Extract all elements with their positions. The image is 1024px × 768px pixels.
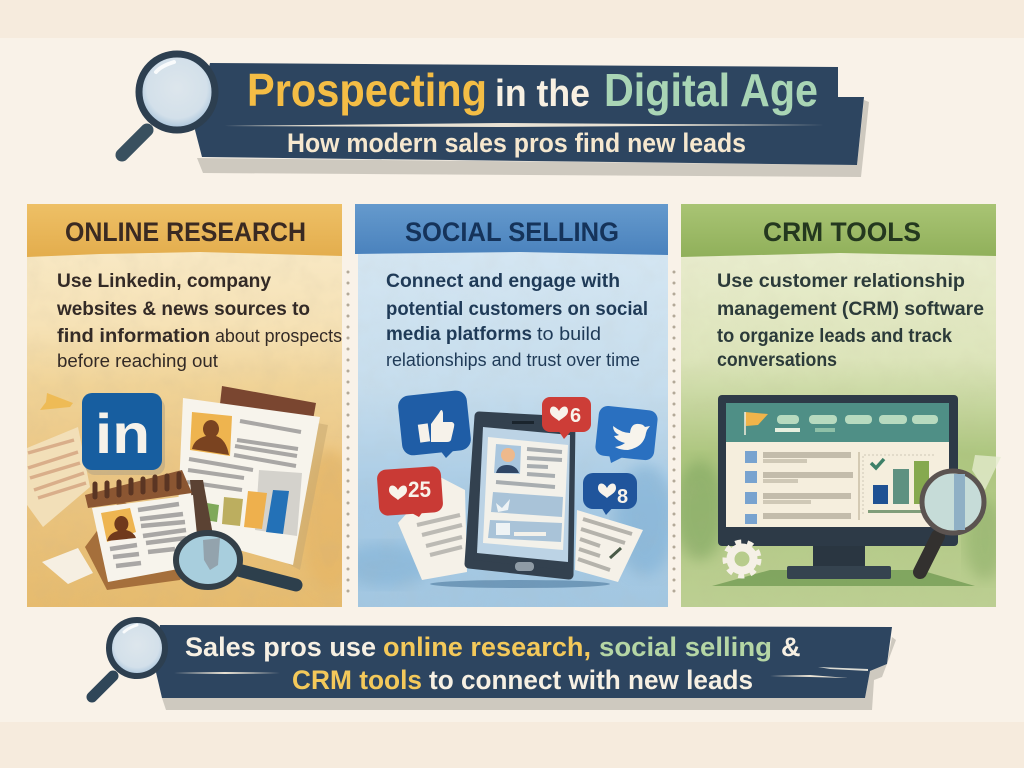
icon: tablet xyxy=(430,416,610,588)
background note xyxy=(27,393,90,527)
heading: CRM TOOLS xyxy=(763,217,921,247)
icon: likes 6 bubble xyxy=(542,397,591,439)
icon: LinkedIn: in xyxy=(95,402,150,465)
illustration: research desk xyxy=(27,386,328,590)
icon: monitor xyxy=(718,395,958,579)
icon: gear xyxy=(725,542,759,576)
text block: about prospects xyxy=(215,326,342,346)
heading xyxy=(27,204,342,257)
right paper xyxy=(575,510,643,582)
heading xyxy=(355,204,668,255)
icon: magnifying glass xyxy=(920,471,984,572)
bar chart xyxy=(863,455,936,514)
calendar notebook xyxy=(85,470,213,590)
conclusion text: Sales pros use xyxy=(185,632,376,662)
text block: Use Linkedin, company xyxy=(57,271,271,292)
text block xyxy=(386,271,648,370)
panel: CRM tools xyxy=(674,204,1005,607)
dotted dividers xyxy=(346,272,350,600)
conclusion text: CRM tools xyxy=(292,665,422,695)
icon: thumbs up bubble xyxy=(397,390,472,458)
icon: title magnifying glass xyxy=(122,54,215,155)
icon: conclusion magnifying glass xyxy=(92,620,165,697)
illustration: social media tablet xyxy=(376,390,658,588)
text block: before reaching out xyxy=(57,351,218,371)
subtitle: How modern sales pros find new leads xyxy=(287,128,746,158)
text block: to build xyxy=(537,324,601,344)
text block: Use customer relationship xyxy=(717,271,965,292)
title xyxy=(247,64,818,116)
CRM lead list xyxy=(745,451,859,524)
document with chart xyxy=(177,386,328,570)
icon: LinkedIn xyxy=(82,393,165,475)
text block xyxy=(717,271,984,371)
title: Digital Age xyxy=(604,64,818,116)
icon: likes 8 bubble: 8 xyxy=(617,486,628,508)
title: Prospecting xyxy=(247,64,487,116)
conclusion banner xyxy=(155,625,896,710)
heading xyxy=(681,204,996,257)
conclusion text: to connect with new leads xyxy=(429,665,753,695)
text block: conversations xyxy=(717,350,837,371)
icon: likes 6 bubble: 6 xyxy=(570,405,581,427)
text block: management (CRM) software xyxy=(717,299,984,320)
icon: twitter bubble xyxy=(595,405,658,463)
icon: magnifying glass xyxy=(176,533,296,587)
left paper xyxy=(398,477,467,580)
heading: ONLINE RESEARCH xyxy=(65,217,306,247)
text block: to organize leads and track xyxy=(717,326,952,347)
text block: websites & news sources to xyxy=(56,299,310,320)
text block: media platforms xyxy=(386,324,532,345)
text block: relationships and trust over time xyxy=(386,350,640,370)
heading: SOCIAL SELLING xyxy=(405,217,619,247)
text block: Connect and engage with xyxy=(386,271,620,292)
panel: social selling xyxy=(340,204,675,607)
conclusion text: social selling xyxy=(599,632,772,662)
illustration: CRM monitor xyxy=(712,395,1001,586)
conclusion text: online research, xyxy=(383,632,591,662)
icon: likes 25 bubble: 25 xyxy=(408,477,431,502)
conclusion text xyxy=(185,632,800,695)
title: in the xyxy=(495,73,590,115)
text block xyxy=(56,271,342,371)
icon: likes 8 bubble xyxy=(583,473,637,515)
title banner xyxy=(195,63,869,177)
panel: online research xyxy=(27,204,360,607)
conclusion text: & xyxy=(781,632,800,662)
envelope xyxy=(42,548,93,584)
text block: potential customers on social xyxy=(386,299,648,320)
text block: find information xyxy=(57,326,210,347)
icon: likes 25 bubble xyxy=(376,466,444,517)
